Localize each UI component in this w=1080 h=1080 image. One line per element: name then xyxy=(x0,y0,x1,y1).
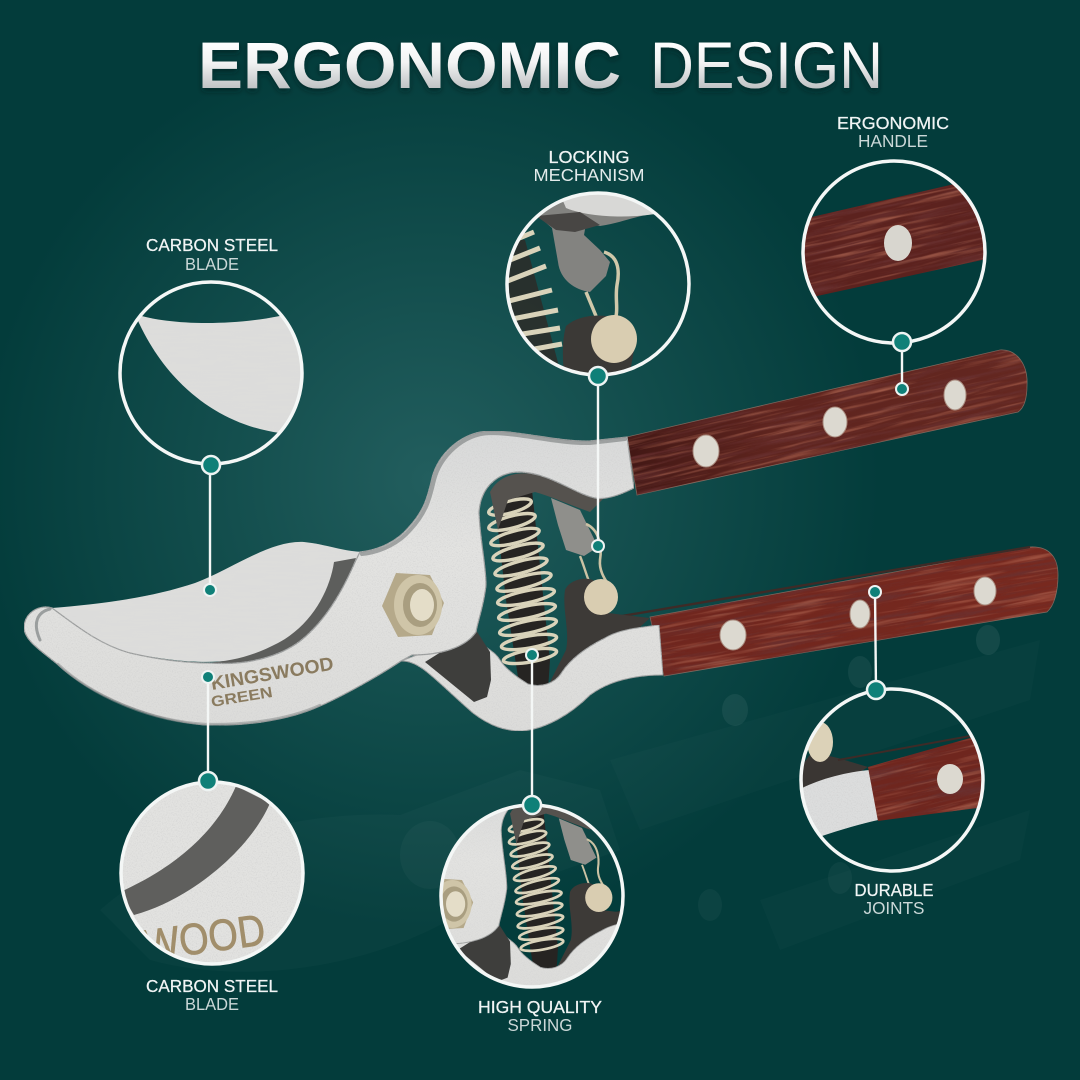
faint floor reflection of the shears xyxy=(100,625,1040,972)
callout: durable joints xyxy=(799,585,985,914)
pruning shears xyxy=(24,266,1080,744)
label: CARBON STEEL xyxy=(146,976,278,996)
callout: locking mechanism xyxy=(500,147,689,552)
blade bevel xyxy=(205,558,356,664)
label: DURABLE xyxy=(854,880,934,900)
label xyxy=(854,880,934,918)
bottom wooden handle xyxy=(588,480,1080,744)
label xyxy=(146,235,278,274)
dark casting at pivot xyxy=(425,630,491,702)
title: DESIGN xyxy=(650,28,883,102)
label: HANDLE xyxy=(858,131,928,151)
blade xyxy=(52,542,365,662)
zoom circle: blade edge and brand xyxy=(122,784,302,962)
label xyxy=(837,113,949,151)
label: HIGH QUALITY xyxy=(478,997,602,1017)
main body with hook xyxy=(24,431,634,725)
lower arm xyxy=(401,625,663,731)
label: JOINTS xyxy=(864,898,924,918)
label: BLADE xyxy=(185,254,239,274)
label: LOCKING xyxy=(548,147,630,167)
label xyxy=(146,976,278,1014)
callout: carbon steel blade, top xyxy=(120,235,310,596)
zoom circle: spring xyxy=(439,804,625,989)
zoom circle: wood handle xyxy=(804,184,984,296)
zoom circle: blade edge and brand: WOOD xyxy=(141,905,268,971)
top wooden handle xyxy=(628,350,1028,496)
label: BLADE xyxy=(185,994,239,1014)
label: MECHANISM xyxy=(534,165,644,185)
title xyxy=(198,28,883,102)
brand mark: KINGSWOOD xyxy=(209,654,335,695)
label: SPRING xyxy=(508,1015,572,1035)
callout: high quality spring xyxy=(439,648,625,1031)
zoom circle: joint xyxy=(802,722,982,836)
metal edge shading xyxy=(36,433,625,724)
label xyxy=(478,997,602,1035)
brand mark: GREEN xyxy=(210,684,274,711)
title: ERGONOMIC xyxy=(198,28,621,102)
label: CARBON STEEL xyxy=(146,235,278,255)
spring xyxy=(487,490,558,690)
callout: ergonomic handle xyxy=(801,116,987,396)
zoom circle: lock detail xyxy=(508,194,654,373)
lock casting and link xyxy=(490,473,650,690)
label: ERGONOMIC xyxy=(837,113,949,133)
label xyxy=(534,147,644,185)
pivot bolt xyxy=(382,573,444,637)
zoom circle: blade xyxy=(138,316,300,433)
brand mark xyxy=(209,654,335,711)
callout: carbon steel blade, bottom xyxy=(115,671,310,1014)
